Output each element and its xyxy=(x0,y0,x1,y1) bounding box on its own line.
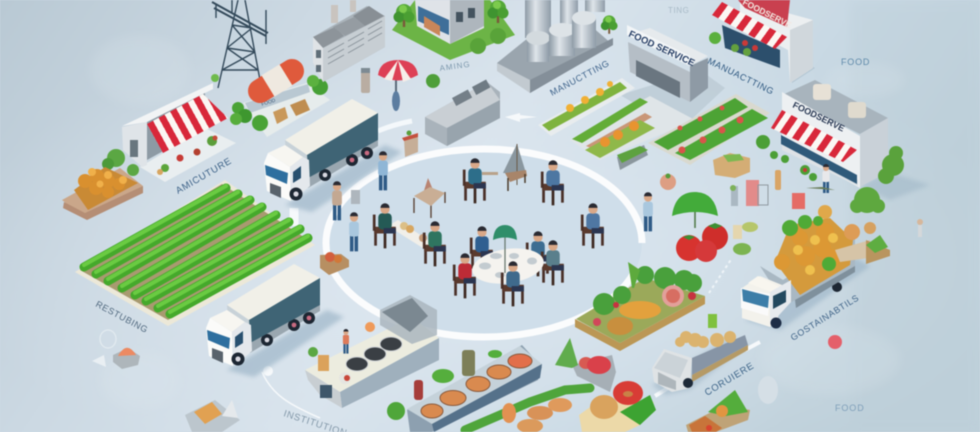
staff near truck xyxy=(320,130,418,275)
table: parasol seat top xyxy=(503,144,527,191)
standing server at right of circle xyxy=(643,192,653,231)
red and white storage tank on platform xyxy=(211,71,330,137)
vegetable beds, right cluster xyxy=(648,94,770,165)
pizza conveyor xyxy=(387,345,542,432)
seated diner top xyxy=(463,158,498,203)
round table with parasol xyxy=(453,225,564,306)
food service building with sign xyxy=(620,25,725,130)
crop field rows xyxy=(75,180,315,326)
seated diner right xyxy=(541,160,564,205)
market goods on ground xyxy=(660,153,835,219)
seating area with tables xyxy=(373,144,604,306)
red ornament and faint sketch xyxy=(758,335,842,404)
silo factory xyxy=(497,0,618,98)
market stall with awning xyxy=(122,83,236,182)
label: agriculture: AMICUTURE xyxy=(174,156,234,197)
crate of baked goods with tree xyxy=(62,149,143,220)
silo factory: MANUCTTING xyxy=(548,58,611,98)
delivery truck lower xyxy=(206,264,344,377)
small cylinder, red parasol and shrub xyxy=(361,60,440,111)
diner far right xyxy=(581,203,604,248)
small equipment lower left xyxy=(185,400,240,432)
bottom right produce box xyxy=(686,390,750,432)
cooking counter xyxy=(305,295,439,408)
top right store with awning xyxy=(709,0,815,83)
right foodservice store: FOODSERVE xyxy=(791,100,846,134)
food service building with sign: FOOD SERVICE xyxy=(627,29,696,69)
small delivery truck with goods xyxy=(652,314,748,395)
farm building on green lawn: AMING xyxy=(439,60,471,73)
large tray of food xyxy=(575,262,705,351)
central circular flow path xyxy=(262,113,760,418)
long table with diners xyxy=(373,203,446,266)
red and white storage tank on platform: FOOD xyxy=(261,98,277,108)
small crate icon lower left xyxy=(92,330,140,369)
bottom food spread xyxy=(465,338,656,432)
label: consumer: CORUIERE xyxy=(703,360,756,399)
goods crates right xyxy=(835,219,923,264)
power pylon xyxy=(212,0,268,88)
label: restaurant: RESTUBING xyxy=(94,299,150,335)
truck loaded with produce xyxy=(741,215,870,330)
label: sustainability: GOSTAINABTILS xyxy=(789,293,861,343)
label: food bottom right: FOOD xyxy=(835,403,865,413)
grey industrial building xyxy=(313,0,385,82)
vegetable beds, left cluster xyxy=(538,78,695,170)
delivery truck upper xyxy=(264,99,402,212)
label: manufacturing right: MANUACTTING xyxy=(706,56,776,97)
green parasol and tomatoes xyxy=(672,192,758,262)
farm building on green lawn xyxy=(392,0,515,73)
right foodservice store xyxy=(756,80,930,213)
grey cooking equipment block xyxy=(425,79,500,146)
faint label: top: TING xyxy=(668,6,690,15)
empty small table xyxy=(414,178,445,218)
label: food top right: FOOD xyxy=(841,57,870,67)
